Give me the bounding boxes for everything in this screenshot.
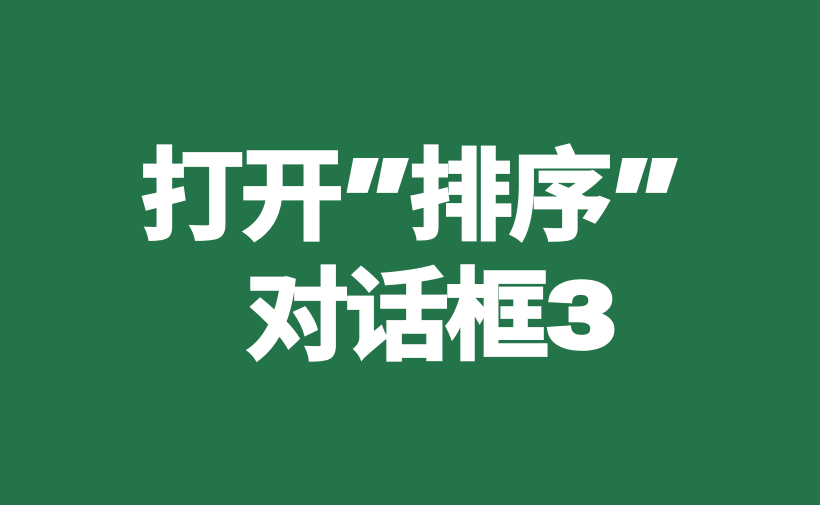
title line 1: 开	[240, 141, 344, 253]
title line 2: 框	[445, 261, 549, 373]
title line 2: 3	[548, 262, 615, 367]
title line 2: 对	[245, 261, 349, 373]
title line 1: 序	[509, 141, 613, 253]
title line 1: "	[318, 135, 421, 269]
title line 1: 打	[140, 141, 244, 253]
title line 1: 排	[409, 141, 513, 253]
title line 2: 话	[345, 261, 449, 373]
title line 1: "	[587, 135, 690, 269]
title line 2	[245, 261, 615, 373]
title line 1	[140, 135, 690, 269]
